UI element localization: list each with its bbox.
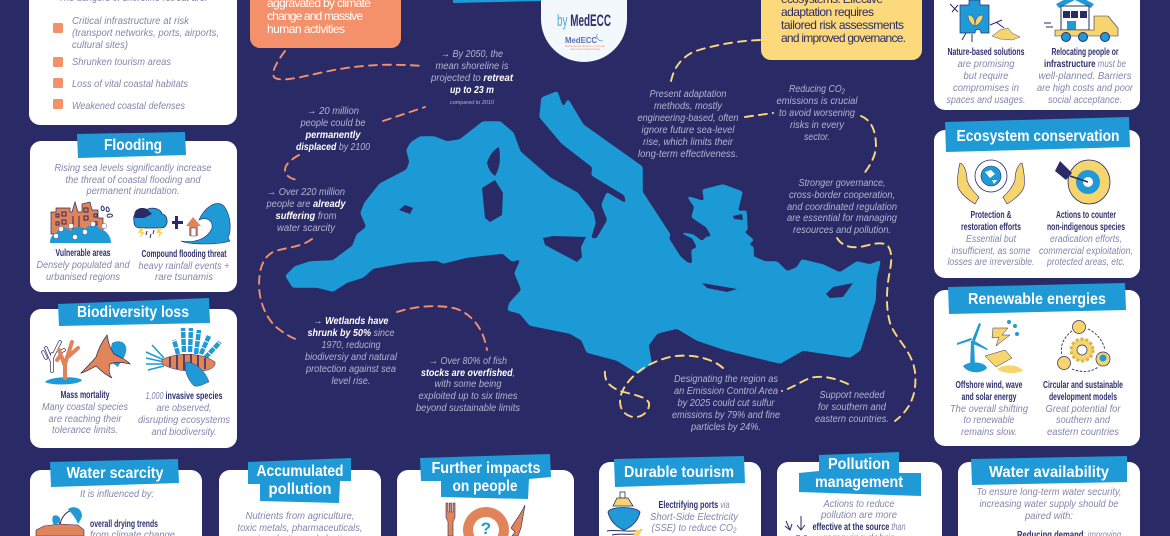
label: offshore energy: Offshore wind, wave — [956, 379, 1023, 391]
intro text: It is influenced by: — [80, 488, 154, 500]
label: nature-based solutions: but require — [964, 70, 1009, 82]
icon: storm plus tidal wave — [134, 204, 230, 244]
bullet list: cultural sites) — [72, 39, 128, 51]
bullet list: (transport networks, ports, airports, — [72, 27, 219, 39]
text: displaced people — [296, 105, 370, 153]
text: wetlands: biodiversiy and natural — [305, 351, 398, 363]
heading — [799, 452, 921, 496]
label: relocating: are high costs and poor — [1037, 82, 1133, 94]
label: nature-based solutions: compromises in — [953, 82, 1019, 94]
icon: house on truck — [1044, 0, 1118, 42]
label: vulnerable areas — [36, 247, 130, 283]
heading: on people — [452, 478, 518, 495]
label: circular models: Great potential for — [1046, 403, 1121, 415]
icon: circular economy gear — [1058, 320, 1110, 371]
text: shoreline retreat — [430, 48, 513, 106]
text: wetlands: → Wetlands have — [314, 315, 389, 327]
text block: Nutrients from agriculture, — [246, 510, 354, 522]
badge: by MedECC — [541, 0, 627, 62]
heading: Further impacts — [432, 460, 540, 477]
dashed connectors: yellow — [605, 40, 915, 421]
text: adaptation methods: methods, mostly — [654, 100, 723, 112]
text: governance: resources and pollution. — [793, 224, 891, 236]
badge: by MedECC: Mediterranean Experts on Climate — [565, 44, 605, 48]
text: governance: are essential for managing — [787, 212, 897, 224]
heading — [971, 456, 1127, 485]
badge: by MedECC: by MedECC — [557, 11, 611, 30]
text: wetlands: shrunk by 50% since — [308, 327, 395, 339]
label: counter non-indigenous: commercial exploitation, — [1039, 245, 1133, 257]
text: adaptation methods: long-term effectiveness. — [638, 148, 738, 160]
dashed connectors: orange — [259, 51, 487, 350]
icon: empty plate — [446, 503, 525, 536]
heading: Durable tourism — [624, 464, 734, 481]
text: drying trends: overall drying trends — [90, 518, 158, 530]
text: displaced people: permanently — [305, 129, 362, 141]
text: adaptation methods: Present adaptation — [650, 88, 727, 100]
text: water scarcity stat: suffering from — [276, 210, 337, 222]
label: invasive species: and biodiversity. — [152, 426, 216, 438]
text block: pollution are more — [820, 509, 897, 521]
text: fish stocks: beyond sustainable limits — [416, 402, 521, 414]
orange callout: human activities — [267, 22, 345, 36]
label: offshore energy: The overall shifting — [950, 403, 1028, 415]
panel: accumulated pollution — [219, 458, 381, 536]
heading — [948, 283, 1126, 314]
label: circular models — [1043, 379, 1123, 438]
text: displaced people: displaced by 2100 — [296, 141, 370, 153]
panel: pollution management — [777, 452, 942, 536]
yellow callout: adaptation requires — [781, 5, 874, 19]
icon: lionfish — [146, 328, 220, 386]
orange callout: change and massive — [267, 9, 363, 23]
label: nature-based solutions: are promising — [958, 58, 1015, 70]
label: invasive species: 1,000 invasive species — [146, 390, 223, 402]
icon: drying plant — [36, 507, 84, 536]
text: adaptation methods: ignore future sea-level — [642, 124, 735, 136]
heading — [58, 298, 210, 326]
heading: Accumulated — [256, 463, 344, 480]
panel: renewable energies — [934, 283, 1140, 446]
intro text: the threat of coastal flooding and — [66, 174, 202, 186]
label: compound flooding — [138, 248, 230, 283]
text: support needed: Support needed — [820, 389, 886, 401]
text: support needed — [815, 389, 889, 425]
bullet list: Weakened coastal defenses — [72, 100, 186, 112]
icon: puzzle with plant — [950, 0, 1020, 42]
panel: biodiversity loss — [30, 298, 237, 448]
text: emission control area: Designating the region as — [674, 373, 779, 385]
text block: Short-Side Electricity — [650, 511, 739, 523]
label: circular models: development models — [1049, 391, 1117, 403]
label: counter non-indigenous: Actions to counter — [1056, 209, 1116, 221]
label: counter non-indigenous: non-indigenous species — [1047, 221, 1125, 233]
label: relocating: social acceptance. — [1048, 94, 1122, 106]
label: mass mortality: Mass mortality — [60, 389, 110, 401]
text: emission control area: an Emission Control Area — [674, 385, 778, 397]
text block: Actions to reduce — [823, 498, 895, 510]
heading — [77, 132, 186, 158]
heading: Ecosystem conservation — [956, 128, 1120, 145]
text: fish stocks: exploited up to six times — [418, 390, 518, 402]
label: offshore energy: to renewable — [964, 414, 1015, 426]
label: invasive species — [138, 390, 231, 438]
label: circular models: Circular and sustainable — [1043, 379, 1123, 391]
label: compound flooding: Compound flooding threat — [142, 248, 227, 260]
label: relocating — [1037, 46, 1133, 106]
text: water scarcity stat: → Over 220 million — [267, 186, 345, 198]
label: circular models: southern and — [1056, 414, 1111, 426]
text: displaced people: people could be — [300, 117, 366, 129]
intro text — [54, 162, 212, 197]
text: water scarcity stat: people are already — [266, 198, 347, 210]
text: reducing CO2: emissions is crucial — [776, 95, 858, 107]
map: Mediterranean Sea — [286, 92, 880, 373]
panel: water scarcity — [30, 459, 202, 536]
text block — [976, 486, 1122, 536]
label: offshore energy: remains slow. — [961, 426, 1017, 438]
text: reducing CO2: Reducing CO₂ — [789, 83, 845, 95]
label: invasive species: are observed, — [156, 402, 212, 414]
heading — [614, 456, 745, 487]
text: governance: and coordinated regulation — [787, 201, 897, 213]
yellow callout: and improved governance. — [781, 31, 906, 45]
text: fish stocks: with some being — [434, 378, 502, 390]
text: emission control area: emissions by 79% and fine — [672, 409, 780, 421]
panel: further impacts on people — [397, 454, 574, 536]
title banner edge — [453, 0, 585, 3]
label: protection: losses are irreversible. — [948, 256, 1034, 268]
panel: ecosystem conservation — [934, 117, 1140, 278]
text block: increasing water supply should be — [980, 498, 1119, 510]
text: shoreline retreat: → By 2050, the — [441, 48, 503, 60]
heading — [420, 454, 551, 499]
label: compound flooding: rare tsunamis — [155, 271, 214, 283]
label: relocating: well-planned. Barriers — [1038, 70, 1132, 82]
text: shoreline retreat: up to 23 m — [450, 84, 494, 96]
label: invasive species: disrupting ecosystems — [138, 414, 231, 426]
badge: by MedECC: and environmental Change — [570, 47, 600, 51]
icon: ship — [607, 492, 642, 536]
label: counter non-indigenous — [1039, 209, 1133, 268]
text: fish stocks: stocks are overfished, — [421, 367, 515, 379]
label: relocating: Relocating people or — [1052, 46, 1118, 58]
text: governance: Stronger governance, — [798, 177, 886, 189]
label: protection — [948, 209, 1034, 268]
label: compound flooding: heavy rainfall events + — [138, 260, 230, 272]
panel: water availability — [958, 456, 1140, 536]
yellow callout: tailored risk assessments — [781, 18, 904, 32]
text: adaptation methods: rise, which limits their — [643, 136, 733, 148]
yellow callout — [761, 0, 922, 60]
text: shoreline retreat: compared to 2010 — [450, 100, 495, 106]
text: adaptation methods — [638, 88, 739, 160]
panel: durable tourism — [599, 456, 761, 536]
badge: by MedECC: MedECC — [565, 36, 597, 45]
heading: management — [815, 474, 903, 491]
heading: Pollution — [828, 456, 890, 473]
text: wetlands: protection against sea — [305, 363, 396, 375]
label: circular models: eastern countries — [1047, 426, 1120, 438]
bullet list: Shrunken tourism areas — [72, 56, 172, 68]
text: wetlands: 1970, reducing — [322, 339, 381, 351]
icon: crowded city — [50, 202, 112, 243]
label: protection: Essential but — [966, 233, 1017, 245]
text: shoreline retreat: mean shoreline is — [436, 60, 509, 72]
text: drying trends — [90, 518, 175, 536]
text: reducing CO2: to avoid worsening — [779, 107, 855, 119]
text block: effective at the source than — [812, 521, 906, 533]
text: support needed: for southern and — [818, 401, 887, 413]
text: support needed: eastern countries. — [815, 413, 889, 425]
text block: Electrifying ports via — [658, 499, 730, 511]
text: emission control area: by 2025 could cut sulfur — [678, 397, 775, 409]
intro text: permanent inundation. — [86, 185, 180, 197]
heading: Biodiversity loss — [77, 304, 189, 321]
label: relocating: infrastructure must be — [1044, 58, 1126, 70]
text: water scarcity stat — [266, 186, 347, 234]
heading — [945, 117, 1130, 152]
icon: hands around globe — [958, 160, 1024, 204]
text block — [650, 499, 739, 534]
label: offshore energy — [950, 379, 1028, 438]
label: counter non-indigenous: protected areas, etc. — [1046, 256, 1125, 268]
heading: Renewable energies — [968, 291, 1106, 308]
text: reducing CO2: sector. — [804, 131, 830, 143]
text block — [812, 498, 906, 536]
text block: To ensure long-term water security, — [976, 486, 1122, 498]
label: nature-based solutions — [946, 46, 1026, 106]
icon: wind turbine, solar panel, lightning — [957, 320, 1023, 373]
panel: coastal infrastructure (top left) — [29, 0, 237, 125]
text block: toxic metals, pharmaceuticals, — [238, 522, 362, 534]
icon: source arrows — [785, 516, 807, 536]
text: fish stocks: → Over 80% of fish — [429, 355, 507, 367]
intro text: Rising sea levels significantly increase — [54, 162, 212, 174]
text: wetlands: level rise. — [332, 375, 370, 387]
text: reducing CO2 — [776, 83, 858, 143]
heading: Water scarcity — [66, 465, 164, 482]
label: mass mortality — [42, 389, 129, 436]
text: emission control area: particles by 24%. — [690, 421, 761, 433]
text: fish stocks — [416, 355, 521, 414]
text block: paired with: — [1024, 510, 1073, 522]
label: protection: insufficient, as some — [952, 245, 1031, 257]
text: reducing CO2: risks in every — [790, 119, 845, 131]
text: governance: cross-border cooperation, — [789, 189, 895, 201]
label: protection: Protection & — [970, 209, 1012, 221]
heading: Flooding — [104, 137, 162, 154]
text: wetlands — [305, 315, 398, 387]
text: displaced people: → 20 million — [307, 105, 359, 117]
label: mass mortality: are reaching their — [48, 413, 122, 425]
label: nature-based solutions: Nature-based solutions — [948, 46, 1025, 58]
icon: target with arrow — [1055, 160, 1110, 204]
text block: (SSE) to reduce CO₂ — [652, 522, 736, 534]
text: water scarcity stat: water scarcity — [277, 222, 336, 234]
label: vulnerable areas: urbanised regions — [46, 271, 121, 283]
text: shoreline retreat: projected to retreat — [430, 72, 513, 84]
bullet list: Loss of vital coastal habitats — [72, 78, 189, 90]
icon: coral and starfish — [43, 335, 130, 384]
panel: flooding — [30, 132, 237, 292]
label: offshore energy: and solar energy — [962, 391, 1017, 403]
label: counter non-indigenous: eradication efforts, — [1050, 233, 1122, 245]
heading — [50, 459, 179, 487]
text block — [238, 510, 362, 536]
bullet list — [53, 15, 219, 112]
heading: Water availability — [989, 464, 1109, 481]
panel: nature-based solutions and relocation — [934, 0, 1140, 110]
label: protection: restoration efforts — [961, 221, 1021, 233]
label: nature-based solutions: spaces and usages. — [946, 94, 1026, 106]
text: emission control area — [672, 373, 780, 433]
label: vulnerable areas: Vulnerable areas — [56, 247, 111, 259]
label: mass mortality: Many coastal species — [42, 401, 129, 413]
orange callout — [250, 0, 401, 48]
bullet list: Critical infrastructure at risk — [72, 15, 190, 27]
label: mass mortality: tolerance limits. — [52, 424, 118, 436]
text: adaptation methods: engineering-based, often — [638, 112, 739, 124]
label: vulnerable areas: Densely populated and — [36, 259, 130, 271]
text: governance — [787, 177, 897, 236]
heading — [248, 458, 351, 503]
heading: pollution — [268, 481, 332, 498]
